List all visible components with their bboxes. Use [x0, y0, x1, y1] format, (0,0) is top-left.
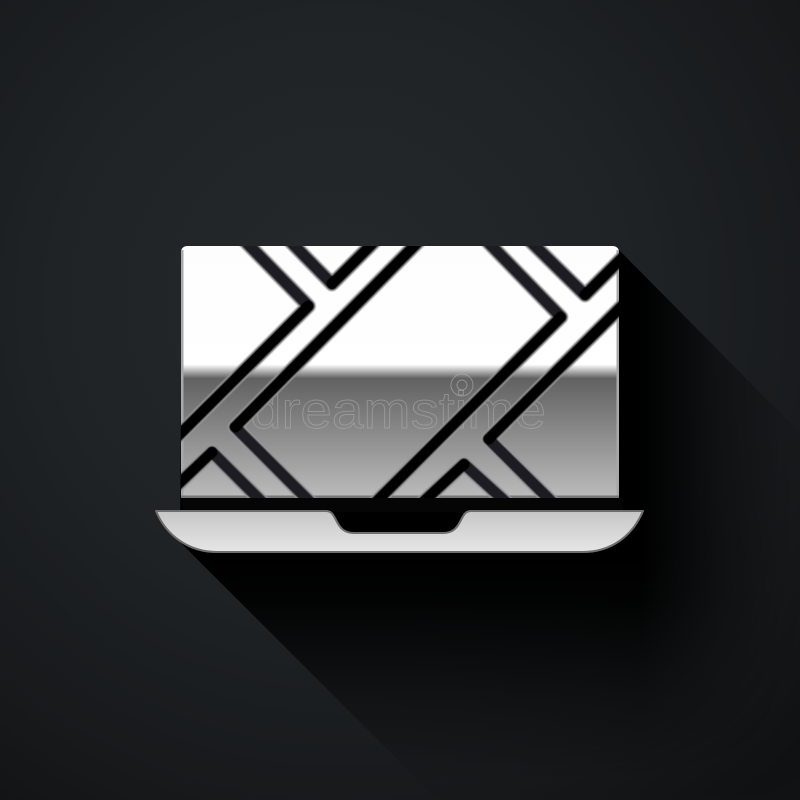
screen panel [181, 246, 619, 498]
watermark text: dreamstime [250, 382, 546, 440]
laptop base [156, 511, 643, 552]
watermark spiral [451, 374, 473, 396]
strips running down-left [181, 246, 619, 498]
laptop screen [181, 246, 619, 498]
strips running down-right [212, 236, 585, 504]
screen frame lines [181, 250, 619, 498]
icon: silver laptop [156, 236, 643, 552]
strip edges [181, 246, 619, 498]
laptop hinge band [183, 498, 623, 512]
geometric pattern strips [181, 246, 619, 498]
long shadow [180, 250, 750, 722]
